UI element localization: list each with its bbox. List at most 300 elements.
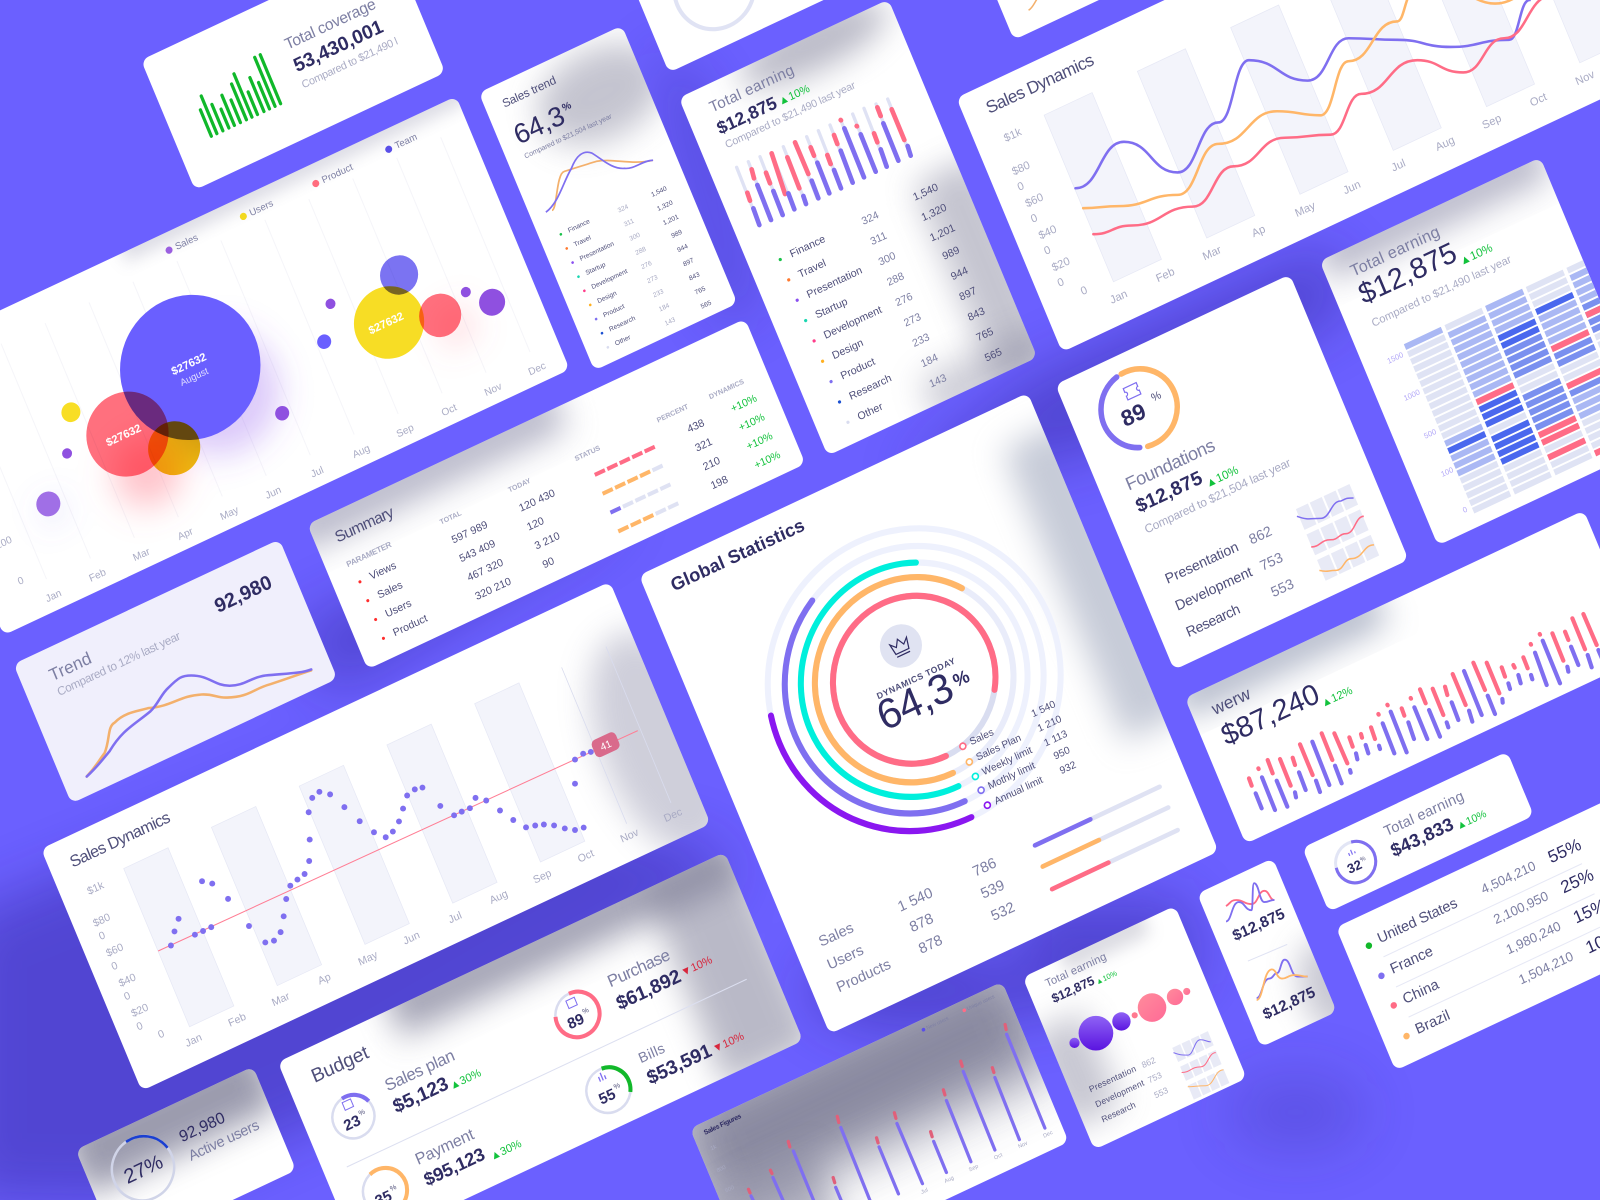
legend bbox=[921, 994, 996, 1034]
sales trend table: 300 bbox=[629, 232, 642, 243]
y axis: $80 bbox=[91, 911, 112, 930]
earning table: 233 bbox=[911, 331, 931, 350]
rows: 862 bbox=[1140, 1055, 1157, 1070]
item: purchase bbox=[547, 929, 718, 1045]
earning table: Finance bbox=[788, 233, 827, 260]
item: payment: ▲30% bbox=[489, 1138, 524, 1163]
divider bbox=[347, 979, 747, 1167]
y axis: 0 bbox=[110, 959, 120, 973]
ring legend: 950 bbox=[1052, 745, 1072, 762]
trend line bbox=[158, 731, 638, 951]
legend: Sales bbox=[174, 232, 200, 253]
y axis: 0 bbox=[156, 1028, 166, 1041]
panel: sparkline pair bbox=[1200, 860, 1334, 1044]
y axis: 0 bbox=[1056, 276, 1066, 290]
grid lines bbox=[0, 137, 530, 579]
rows bbox=[1162, 523, 1297, 641]
heatmap y axis: 1500 bbox=[1386, 350, 1405, 366]
centre value: % bbox=[950, 665, 972, 691]
mini chart bands bbox=[1296, 484, 1379, 581]
stats table: 786 bbox=[971, 855, 999, 881]
ring legend: Weekly limit bbox=[981, 745, 1034, 778]
earning table: 273 bbox=[902, 311, 923, 330]
item: payment bbox=[348, 1103, 526, 1200]
heatmap grid bbox=[1404, 251, 1600, 514]
sales trend table: Presentation bbox=[579, 240, 616, 263]
bubble values bbox=[90, 267, 406, 459]
mini charts bbox=[1297, 498, 1374, 571]
panel: total earning heatmap bbox=[1322, 160, 1600, 543]
rows bbox=[1087, 1054, 1170, 1125]
sales trend table: Finance bbox=[567, 218, 591, 235]
y axis: $40 bbox=[117, 971, 138, 990]
panel: total earning heatmap: Total earning bbox=[1348, 223, 1442, 281]
item: bills: $53,591 bbox=[644, 1039, 715, 1089]
x axis: Jun bbox=[401, 929, 422, 948]
country rows: 55% bbox=[1545, 834, 1584, 867]
ring legend: Annual limit bbox=[993, 775, 1045, 807]
country rows: China bbox=[1401, 976, 1442, 1008]
sparkline: second bbox=[1257, 960, 1308, 1000]
y axis: 0 bbox=[1079, 284, 1089, 298]
earning table: 276 bbox=[894, 290, 915, 309]
sales trend table: Startup bbox=[585, 261, 607, 277]
panel: sales figures bbox=[692, 984, 1066, 1200]
panel: summary bbox=[310, 322, 803, 667]
rows: 753 bbox=[1146, 1070, 1163, 1085]
axis labels: Dec bbox=[1042, 1130, 1054, 1140]
panel: werw: werw bbox=[1208, 683, 1254, 719]
rows: Research bbox=[1184, 601, 1243, 641]
coverage text: 53,430,001 bbox=[290, 15, 387, 77]
x axis: Mar bbox=[270, 990, 292, 1009]
earning table: 897 bbox=[958, 285, 978, 304]
earning table: 565 bbox=[983, 346, 1004, 365]
table rows: Views bbox=[368, 560, 398, 583]
panel: active users: Active users bbox=[186, 1117, 262, 1165]
table rows: 198 bbox=[709, 473, 730, 492]
sales trend table: Development bbox=[591, 268, 629, 291]
axis labels: Jun bbox=[264, 485, 283, 502]
y axis: 0 bbox=[1029, 212, 1039, 226]
panel: werw bbox=[1187, 513, 1600, 842]
bubble glows bbox=[7, 225, 487, 552]
y axis bbox=[79, 879, 168, 1049]
axis labels: Feb bbox=[88, 567, 108, 585]
scatter points bbox=[168, 749, 594, 948]
legend: Unique users bbox=[966, 994, 996, 1012]
earning table: 1,540 bbox=[911, 181, 940, 204]
axis labels: Sep bbox=[968, 1164, 979, 1173]
panel: sales trend: % bbox=[561, 100, 573, 114]
x axis: Dec bbox=[662, 806, 685, 825]
sales trend table: 143 bbox=[664, 316, 677, 328]
icon: ticket bbox=[1123, 383, 1141, 400]
country rows: 2,100,950 bbox=[1491, 888, 1550, 927]
x axis: Jan bbox=[1108, 288, 1129, 307]
table rows: +10% bbox=[737, 411, 767, 434]
earning table bbox=[777, 180, 1008, 430]
panel: sales trend: 64,3 bbox=[509, 99, 569, 150]
stats table bbox=[816, 853, 1017, 997]
table rows: 3 210 bbox=[533, 530, 562, 552]
rows: Presentation bbox=[1087, 1063, 1138, 1094]
table headers: PERCENT bbox=[656, 402, 690, 425]
stats table: Users bbox=[825, 942, 866, 974]
axis labels: Jan bbox=[44, 588, 63, 605]
panel: summary: Summary bbox=[333, 504, 397, 546]
bubble values: $27632 bbox=[105, 422, 143, 449]
sales trend table: 233 bbox=[652, 288, 665, 299]
earning table: 143 bbox=[928, 372, 948, 391]
country rows: 4,504,210 bbox=[1479, 858, 1538, 897]
earning table: 324 bbox=[860, 209, 881, 228]
x axis: Oct bbox=[1528, 91, 1550, 110]
earning table: Design bbox=[830, 337, 865, 362]
sales trend table: 1,320 bbox=[656, 199, 674, 213]
x axis: Sep bbox=[1481, 112, 1503, 132]
table headers: TOTAL bbox=[439, 509, 463, 526]
panel: sales dynamics lines bbox=[956, 0, 1600, 352]
sales trend table: 184 bbox=[658, 302, 671, 313]
axis labels bbox=[707, 1010, 1054, 1200]
rows: 753 bbox=[1258, 550, 1286, 575]
table rows bbox=[356, 390, 783, 646]
panel: total earning bars: Total earning bbox=[707, 62, 797, 116]
axis labels: Oct bbox=[993, 1152, 1004, 1162]
country rows: Brazil bbox=[1413, 1008, 1452, 1038]
earning table: 1,320 bbox=[920, 202, 949, 224]
legend: Users bbox=[248, 198, 275, 219]
country rows: 1,504,210 bbox=[1516, 948, 1576, 987]
stats table: 878 bbox=[908, 911, 936, 936]
x axis: Jul bbox=[1390, 157, 1407, 175]
x axis bbox=[1108, 68, 1597, 307]
y axis: $60 bbox=[1024, 191, 1045, 210]
rows: Research bbox=[1100, 1100, 1137, 1124]
panel: foundations: Foundations bbox=[1122, 434, 1218, 494]
stats table: Products bbox=[834, 957, 893, 996]
x axis: Ap bbox=[1250, 223, 1267, 240]
country rows: 1,980,240 bbox=[1504, 918, 1563, 957]
table rows: 543 409 bbox=[458, 538, 497, 565]
panel: sales dynamics dots bbox=[44, 584, 708, 1088]
panel: countries bbox=[1336, 775, 1600, 1071]
sales trend table: Design bbox=[596, 290, 618, 305]
axis labels: Sep bbox=[395, 422, 416, 440]
bubble values: $27632 bbox=[170, 351, 208, 378]
country rows: 25% bbox=[1557, 864, 1597, 897]
y axis: $80 bbox=[1010, 159, 1032, 178]
bubble values: $27632 bbox=[367, 310, 406, 337]
panel: budget bbox=[280, 854, 801, 1200]
panel: total earning bubbles: ▲10% bbox=[1094, 968, 1119, 987]
table headers: DYNAMICS bbox=[708, 378, 746, 401]
centre value: DYNAMICS TODAY bbox=[875, 656, 957, 701]
table rows: 467 320 bbox=[466, 556, 505, 584]
panel: trend bbox=[13, 539, 337, 804]
earning table: Other bbox=[856, 400, 885, 423]
y axis: 0 bbox=[135, 1020, 145, 1033]
panel: total earning bars: $12,875 bbox=[714, 93, 780, 138]
panel: trend: Compared to 12% last year bbox=[55, 629, 182, 699]
panel: total earning bubbles bbox=[1025, 908, 1244, 1147]
axis labels: 0 bbox=[16, 575, 26, 588]
axis labels: Aug bbox=[351, 443, 372, 461]
item: sales plan: ▲30% bbox=[448, 1067, 483, 1092]
y axis: $60 bbox=[104, 941, 125, 960]
axis labels: Nov bbox=[483, 381, 504, 399]
y axis bbox=[997, 126, 1090, 306]
rows: 553 bbox=[1153, 1085, 1170, 1100]
panel: bubble chart bbox=[0, 79, 578, 635]
earning table: Product bbox=[839, 356, 877, 382]
sales trend table: 765 bbox=[694, 285, 707, 297]
sales trend table: 276 bbox=[640, 260, 653, 271]
x axis: Sep bbox=[531, 867, 553, 886]
y axis: 0 bbox=[1042, 244, 1053, 258]
sales trend table: Research bbox=[608, 315, 637, 333]
axis labels: 1k bbox=[710, 1144, 718, 1152]
panel: total coverage bbox=[141, 0, 445, 190]
panel: total earning bars: Compared to $21,490 last year bbox=[723, 79, 858, 151]
bubble cluster bbox=[1069, 988, 1190, 1051]
x axis: Oct bbox=[576, 847, 596, 866]
table rows: Sales bbox=[376, 579, 405, 601]
panel: cropped ring card bbox=[630, 0, 856, 73]
y axis: $1k bbox=[1002, 126, 1024, 145]
axis labels: Aug bbox=[944, 1175, 955, 1185]
sales trend table: 897 bbox=[682, 257, 695, 268]
legend: Product bbox=[320, 162, 355, 186]
sales trend table: 288 bbox=[634, 246, 647, 257]
mini charts bbox=[1173, 1040, 1223, 1087]
x axis: Feb bbox=[227, 1011, 248, 1030]
ring legend: 1 210 bbox=[1036, 714, 1064, 735]
panel: foundations: 89 bbox=[1117, 398, 1149, 432]
axis labels bbox=[0, 296, 548, 616]
sales trend table: Other bbox=[614, 334, 633, 348]
panel: active users: 92,980 bbox=[177, 1109, 228, 1146]
item: sales plan bbox=[321, 1037, 485, 1150]
ring legend: Sales bbox=[968, 727, 995, 748]
earning table: 989 bbox=[941, 244, 961, 263]
item: bills: 55 bbox=[596, 1085, 619, 1109]
value tag: 41 bbox=[599, 739, 614, 754]
stats table: 878 bbox=[917, 932, 945, 958]
table headers: PARAMETER bbox=[345, 540, 393, 569]
y axis: 0 bbox=[122, 990, 132, 1003]
axis labels: Apr bbox=[176, 526, 195, 543]
axis labels: 600 bbox=[724, 1185, 735, 1194]
table rows: 120 430 bbox=[517, 487, 557, 515]
y axis: 0 bbox=[97, 929, 107, 943]
panel: global statistics bbox=[639, 382, 1243, 1034]
panel: budget: Budget bbox=[308, 1041, 372, 1088]
line chart: sales trend bbox=[546, 152, 653, 212]
title: Global Statistics bbox=[667, 514, 807, 595]
panel: sparkline pair: $12,875 bbox=[1230, 905, 1288, 945]
earning table: 184 bbox=[919, 352, 940, 370]
earning table: Research bbox=[847, 372, 894, 403]
earning table: 944 bbox=[949, 264, 970, 283]
item: bills bbox=[577, 1006, 750, 1123]
rows: Development bbox=[1173, 564, 1255, 615]
panel: total earning bars bbox=[681, 2, 1035, 453]
stats table: 1 540 bbox=[896, 885, 935, 916]
panel: total earning bubbles: Total earning bbox=[1044, 951, 1108, 990]
line chart: trend bbox=[87, 669, 311, 777]
sales trend table bbox=[559, 182, 715, 354]
ring: 27 percent bbox=[102, 1126, 184, 1200]
x axis: Jan bbox=[184, 1031, 204, 1050]
rows: 553 bbox=[1269, 576, 1297, 601]
earning table: Travel bbox=[797, 257, 828, 281]
centre value: 64,3 bbox=[870, 663, 960, 740]
x axis: Feb bbox=[1154, 266, 1177, 285]
panel: trend: 92,980 bbox=[211, 571, 275, 618]
panel: sales trend bbox=[481, 28, 735, 368]
panel: werw: $87,240 bbox=[1217, 678, 1324, 752]
bar chart: werw bbox=[1249, 614, 1600, 810]
rows: Presentation bbox=[1163, 539, 1241, 588]
ring legend: Mothly limit bbox=[987, 760, 1037, 792]
sales trend table: 843 bbox=[688, 271, 701, 282]
axis labels: Mar bbox=[132, 546, 152, 564]
sales trend table: 1,540 bbox=[650, 185, 668, 199]
panel: total earning heatmap: ▲10% bbox=[1458, 241, 1494, 268]
panel: total earning small: 32 bbox=[1345, 857, 1364, 877]
x axis: Nov bbox=[619, 826, 641, 846]
panel: total earning bars: ▲10% bbox=[777, 83, 812, 108]
y axis: $40 bbox=[1037, 223, 1059, 242]
earning table: 1,201 bbox=[928, 222, 957, 244]
country rows: United States bbox=[1375, 895, 1460, 947]
table rows: Product bbox=[391, 612, 429, 639]
panel: total earning small: $43,833 bbox=[1387, 813, 1456, 861]
item: payment: $95,123 bbox=[421, 1143, 488, 1190]
table rows: 90 bbox=[541, 555, 556, 571]
mini bands bbox=[1172, 1031, 1229, 1100]
panel: active users: 27% bbox=[121, 1151, 166, 1189]
y axis: $1k bbox=[86, 879, 106, 898]
panel: foundations: Compared to $21,504 last year bbox=[1142, 455, 1293, 536]
table rows: 438 bbox=[686, 417, 706, 436]
panel: sales trend: Compared to $21,504 last year bbox=[523, 112, 614, 160]
ring: 32 percent bbox=[1329, 835, 1382, 890]
panel: total earning heatmap: Compared to $21,490 last year bbox=[1370, 253, 1513, 330]
panel: cropped top card bbox=[975, 0, 1200, 40]
sales trend table: Product bbox=[602, 303, 626, 319]
panel: trend: Trend bbox=[46, 648, 94, 685]
item: payment: % bbox=[389, 1183, 398, 1193]
bubble values: August bbox=[179, 366, 210, 389]
panel: foundations: ▲10% bbox=[1204, 463, 1240, 490]
x axis: Jun bbox=[1342, 178, 1362, 197]
table rows: 597 989 bbox=[450, 519, 490, 546]
x axis: Nov bbox=[1574, 68, 1597, 88]
axis labels: Nov bbox=[1017, 1140, 1029, 1150]
axis labels: May bbox=[219, 504, 241, 523]
earning table: Development bbox=[822, 304, 884, 342]
heatmap y axis: 100 bbox=[1440, 465, 1455, 479]
line chart: sales dynamics bbox=[1076, 0, 1551, 234]
axis labels: Dec bbox=[527, 361, 548, 378]
table rows: +10% bbox=[753, 449, 783, 472]
ring legend: 1 113 bbox=[1043, 729, 1069, 749]
earning table: 311 bbox=[869, 230, 889, 248]
sales trend table: 989 bbox=[670, 229, 683, 240]
item: purchase: ▼10% bbox=[679, 954, 714, 979]
sales trend table: 1,201 bbox=[662, 213, 680, 227]
ring legend: 932 bbox=[1058, 760, 1078, 777]
bar chart: earning bbox=[737, 99, 911, 225]
legend bbox=[164, 130, 419, 259]
item: purchase: $61,892 bbox=[613, 965, 684, 1015]
x axis: May bbox=[357, 949, 380, 969]
ring legend: 1 540 bbox=[1030, 699, 1058, 720]
bar chart: coverage bbox=[191, 55, 281, 136]
item: purchase: Purchase bbox=[605, 945, 673, 991]
axis labels: Jul bbox=[309, 465, 326, 481]
panel: sparkline pair: $12,875 bbox=[1261, 984, 1318, 1023]
table rows: +10% bbox=[729, 392, 759, 415]
table headers: TODAY bbox=[507, 477, 532, 494]
panel: total earning bubbles: $12,875 bbox=[1049, 973, 1097, 1006]
sales trend table: 311 bbox=[623, 218, 635, 229]
item: payment: Payment bbox=[413, 1125, 477, 1169]
ring: 89 percent bbox=[1074, 340, 1204, 476]
country rows bbox=[1361, 834, 1600, 1044]
table rows: 320 210 bbox=[473, 575, 513, 603]
table rows: 120 bbox=[525, 515, 546, 534]
y axis: 0 bbox=[1016, 180, 1026, 194]
panel: werw: ▲12% bbox=[1319, 685, 1355, 710]
table headers bbox=[345, 375, 746, 571]
item: purchase: % bbox=[581, 1006, 591, 1016]
icon: crown bbox=[873, 617, 929, 675]
ring legend: Sales Plan bbox=[975, 733, 1023, 764]
x axis: Ap bbox=[316, 971, 333, 988]
legend: New users bbox=[926, 1016, 950, 1032]
y axis: $20 bbox=[1050, 255, 1072, 274]
panel: foundations: $12,875 bbox=[1133, 467, 1206, 518]
coverage text bbox=[282, 0, 400, 91]
column bands bbox=[1044, 0, 1600, 282]
panel: sales trend: Sales trend bbox=[500, 73, 558, 110]
panel: total earning small bbox=[1302, 752, 1534, 912]
progress bars bbox=[1034, 787, 1178, 889]
rows: 862 bbox=[1247, 523, 1275, 548]
axis labels: 800 bbox=[716, 1165, 727, 1174]
earning table: 300 bbox=[877, 250, 898, 268]
coverage text: Compared to $21,490 l bbox=[300, 35, 400, 91]
earning table: 843 bbox=[966, 305, 987, 324]
item: sales plan: 23 bbox=[341, 1112, 363, 1135]
item: bills: ▼10% bbox=[711, 1030, 746, 1056]
table rows: +10% bbox=[745, 430, 775, 453]
sales trend table: 273 bbox=[646, 274, 659, 285]
heatmap y axis: 500 bbox=[1423, 427, 1438, 441]
item: sales plan: $5,123 bbox=[390, 1072, 452, 1118]
earning table: 765 bbox=[975, 326, 995, 344]
panel: active users bbox=[78, 1069, 294, 1200]
table rows: Users bbox=[384, 597, 413, 620]
item: bills: % bbox=[613, 1081, 622, 1091]
sales trend table: 324 bbox=[617, 203, 630, 215]
heatmap y axis: 1000 bbox=[1402, 387, 1421, 403]
sales trend table: 565 bbox=[700, 299, 713, 311]
